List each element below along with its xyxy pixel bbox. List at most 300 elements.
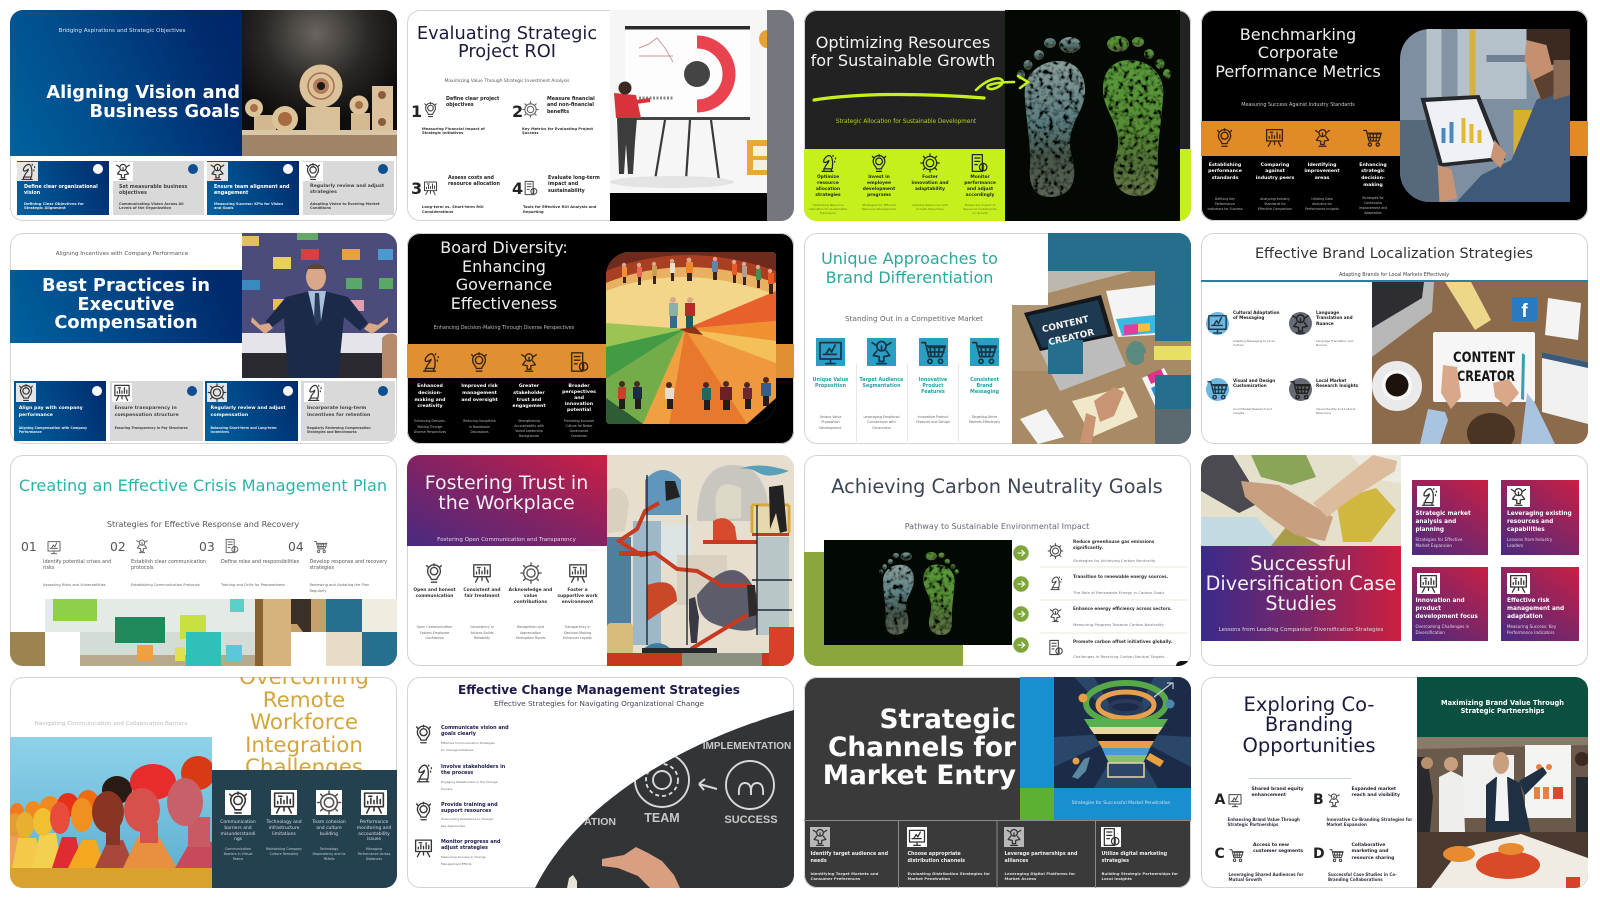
column 3	[911, 153, 949, 211]
heading	[548, 175, 600, 194]
note: Measuring Impact of	[965, 202, 995, 206]
label	[911, 175, 949, 193]
note: Analytics for	[1312, 202, 1332, 206]
label	[461, 384, 498, 404]
icon	[316, 790, 342, 815]
tile subtext: Communicating Vision Across All	[119, 202, 184, 206]
icon: speaker podium	[568, 350, 590, 372]
title: Market Entry	[823, 760, 1016, 791]
title	[239, 667, 369, 780]
heading: support resources	[441, 808, 491, 814]
item 2	[407, 760, 527, 796]
header text: Strategic Partnerships	[1461, 707, 1544, 715]
note: Strengthen Bonds	[516, 636, 545, 640]
icon: gear head	[468, 350, 490, 372]
item 4	[512, 175, 600, 214]
tile text	[115, 406, 179, 420]
heading	[1253, 842, 1303, 856]
note: Management Efforts	[441, 862, 472, 866]
heading	[1233, 310, 1279, 321]
numeral: 4	[512, 179, 523, 198]
tile subtext: Incentives	[210, 430, 229, 434]
photo: chalkboard with team diagram and hand	[535, 710, 794, 888]
note: Features and Design	[916, 420, 950, 424]
letter: A	[1214, 792, 1225, 808]
icon	[45, 539, 63, 555]
title: Exploring Co-	[1244, 693, 1374, 716]
label: Broader	[568, 384, 590, 389]
note: Engaging Stakeholders in the Change	[441, 780, 498, 784]
number: 03	[199, 539, 215, 554]
heading	[908, 850, 965, 864]
note: Branding Collaborations	[1328, 876, 1383, 882]
photo: leafy footprints	[824, 540, 1012, 645]
tile subtext: Aligning Compensation with Company	[19, 426, 87, 430]
label: and adjust	[967, 187, 993, 192]
tile heading: Effective risk	[1507, 598, 1550, 604]
tile subtext	[310, 202, 380, 210]
text: Identify potential crises and	[43, 559, 111, 565]
heading	[1252, 786, 1304, 800]
icon: chess	[419, 350, 441, 372]
note: Market Penetration	[908, 876, 950, 881]
subtext: Strategic Initiatives	[422, 131, 463, 135]
note	[963, 202, 997, 216]
tile heading: product	[1416, 606, 1441, 612]
icon: chess	[822, 154, 836, 172]
tile 3	[205, 380, 298, 440]
title: Evaluating Strategic	[417, 23, 597, 44]
text: Establish clear communication	[131, 559, 206, 565]
label: Proposition	[815, 384, 846, 389]
heading	[1102, 850, 1167, 864]
item 1	[411, 96, 500, 135]
photo: desk with notebook: f	[1521, 300, 1528, 322]
blue subtitle band	[1054, 788, 1191, 820]
column 2	[258, 790, 304, 882]
label: Establishing	[1209, 162, 1241, 168]
heading: Utilize digital marketing	[1102, 852, 1167, 856]
title: Effective Change Management Strategies	[458, 683, 740, 697]
label: adaptability	[915, 187, 945, 192]
note: Barriers in Virtual	[224, 852, 252, 856]
note	[417, 625, 452, 642]
note: Overcoming Resistance to Change:	[441, 817, 494, 821]
tile text: compensation structure	[115, 413, 179, 418]
heading: Identify target audience and	[810, 852, 888, 856]
icon	[520, 562, 542, 584]
title: Workforce	[250, 710, 358, 735]
tile text: Ensure transparency in	[115, 406, 177, 411]
heading	[1073, 539, 1154, 551]
subtitle: Strategies for Successful Market Penetration	[1072, 801, 1170, 806]
item 3	[1044, 603, 1191, 631]
icon: trophy	[1312, 127, 1333, 148]
tile subtext: Adapting Vision to Evolving Market	[310, 202, 380, 206]
label	[970, 378, 999, 396]
column 1	[1201, 121, 1250, 221]
note: Language Translation and	[1316, 338, 1353, 342]
label: strategies	[815, 193, 841, 198]
label	[1304, 162, 1340, 183]
heading: and non-financial	[547, 103, 594, 108]
text: Develop response and recovery	[310, 559, 387, 565]
note: Communication	[225, 847, 251, 851]
dividers	[1040, 565, 1188, 635]
heading: significantly.	[1073, 545, 1103, 550]
note: Framework	[820, 211, 836, 215]
icon	[1047, 639, 1064, 656]
icon	[1047, 607, 1064, 623]
heading: objectives	[446, 103, 474, 108]
label: creativity	[417, 404, 443, 409]
column 4	[955, 149, 1005, 221]
letter: C	[1214, 846, 1225, 862]
tile text: vision	[24, 190, 40, 196]
heading: Transition to renewable energy sources.	[1073, 574, 1168, 579]
note: Recognition and	[517, 625, 544, 629]
tile subtext	[210, 426, 277, 434]
title	[46, 82, 240, 122]
numeral: 1	[411, 102, 422, 121]
tile subtext	[214, 202, 283, 210]
item C	[1201, 841, 1309, 885]
note	[1228, 816, 1300, 826]
title: Creating an Effective Crisis Management Plan	[19, 476, 387, 495]
button	[187, 386, 197, 396]
subtext: Key Metrics for Evaluating Project	[522, 126, 593, 130]
label	[860, 378, 903, 390]
title: Business Goals	[90, 100, 240, 122]
step 3	[188, 537, 284, 597]
label	[1208, 162, 1242, 183]
icon	[524, 180, 538, 196]
illustration: funnel	[1054, 677, 1191, 788]
subtext	[422, 126, 485, 135]
orange band	[407, 344, 794, 378]
label: Technology and	[266, 820, 302, 825]
icon disc	[1289, 378, 1312, 401]
label: Enhancing	[1359, 162, 1387, 168]
heading: adjust strategies	[441, 845, 488, 851]
heading: Leverage partnerships and	[1004, 852, 1077, 856]
tile 1	[14, 380, 106, 440]
icon: chess	[304, 382, 324, 402]
tile note: Performance Indicators	[1507, 630, 1554, 635]
tile text: incentives for retention	[307, 413, 370, 418]
icon: head gear	[872, 154, 886, 172]
label	[813, 378, 848, 390]
heading	[1352, 842, 1394, 862]
slide: Best Practices in Executive Compensation	[10, 232, 397, 444]
lime band	[804, 149, 1191, 221]
note	[1258, 196, 1292, 212]
icon	[567, 562, 589, 584]
subtext: Long-term vs. Short-term ROI	[422, 205, 484, 209]
subtitle: Pathway to Sustainable Environmental Impact	[905, 522, 1089, 531]
title: Effectiveness	[451, 294, 557, 313]
number: 01	[21, 539, 37, 554]
tile heading: Leveraging existing	[1507, 511, 1572, 517]
tile subtext: and Goals	[214, 206, 234, 210]
label: Product	[922, 384, 944, 389]
note: Defining Key	[1215, 196, 1235, 200]
title: Executive	[77, 294, 175, 314]
label: fair treatment	[464, 594, 500, 599]
title: Performance Metrics	[1215, 62, 1381, 81]
subtitle: Strategic Allocation for Sustainable Development	[836, 119, 976, 125]
text: strategies	[310, 565, 334, 571]
icon	[1100, 827, 1120, 847]
heading: Expanded market	[1352, 786, 1396, 792]
tile text: Ensure team alignment and	[214, 184, 290, 190]
note: Performance Across	[358, 852, 390, 856]
note: Identifying Target Markets and	[810, 871, 878, 876]
subtext: Reporting	[523, 210, 544, 214]
green header	[1417, 677, 1588, 737]
photo: leafy footprints	[1005, 10, 1180, 221]
icon: gear	[303, 162, 323, 181]
column 3	[303, 790, 349, 882]
column 1	[407, 342, 456, 442]
icon	[424, 102, 437, 118]
title: Enhancing	[462, 257, 546, 276]
label: issues	[367, 837, 381, 842]
note: Accountability with	[514, 424, 544, 428]
tile note: Overcoming Challenges in	[1416, 624, 1469, 629]
arrow: lime brush stroke	[812, 74, 1030, 102]
photo: content creator desk with teal blocks	[1012, 232, 1191, 444]
label	[815, 174, 841, 198]
subtext: Success	[522, 131, 539, 135]
icon: gear head	[1214, 127, 1235, 148]
tile text	[119, 184, 188, 196]
tile subtext: Levels of the Organization	[119, 206, 171, 210]
subtext: Considerations	[422, 210, 453, 214]
heading	[547, 96, 595, 115]
blue title band	[10, 270, 242, 342]
icon	[810, 827, 830, 847]
label: and	[574, 396, 584, 401]
note	[912, 202, 948, 211]
arrow buttons	[1013, 545, 1029, 653]
icon	[522, 101, 539, 118]
note	[1316, 406, 1355, 414]
note: Mutual Growth	[1228, 876, 1262, 882]
icon	[1228, 847, 1245, 863]
title: Board Diversity:	[440, 238, 568, 257]
column 1	[407, 560, 457, 650]
note	[809, 202, 847, 215]
note: Insights	[1233, 410, 1244, 414]
slide: Fostering Trust in the Workplace	[407, 455, 794, 666]
heading	[1352, 786, 1400, 800]
column 4	[959, 338, 1011, 442]
heading: marketing and	[1352, 849, 1389, 854]
column 4	[1347, 121, 1399, 221]
note	[224, 847, 252, 862]
item 2	[1286, 302, 1371, 350]
text: risks	[43, 565, 54, 571]
tile text: Align pay with company	[19, 406, 83, 411]
title: Effective Brand Localization Strategies	[1255, 246, 1533, 262]
title: Diversification Case	[1206, 572, 1396, 595]
note: Measuring Success in Change	[441, 854, 486, 858]
subtitle: Aligning Incentives with Company Performance	[56, 250, 188, 256]
tile 2	[1501, 480, 1579, 555]
icon	[413, 762, 434, 784]
label: building	[320, 832, 338, 837]
label: trust and	[517, 398, 541, 403]
note: Transparency in	[564, 625, 591, 629]
tile note: Measuring Success: Key	[1507, 624, 1556, 629]
heading	[441, 803, 498, 815]
icon: person	[113, 162, 133, 181]
label: Monitor	[970, 175, 990, 180]
note	[463, 419, 496, 436]
heading: Assess costs and	[448, 176, 494, 181]
heading: Collaborative	[1352, 842, 1385, 848]
title: Achieving Carbon Neutrality Goals	[831, 475, 1163, 498]
photo: content creator desk with teal blocks: CONTENT	[1041, 314, 1091, 335]
button	[93, 164, 103, 174]
tile heading: management and	[1507, 606, 1564, 612]
title	[1215, 26, 1381, 81]
note: Training and Drills for Preparedness	[221, 583, 285, 587]
label: Messaging	[970, 390, 999, 395]
tile heading	[1507, 597, 1564, 621]
slide: Evaluating Strategic Project ROI	[407, 10, 794, 221]
note: Assessing Risks and Vulnerabilities	[43, 583, 106, 587]
note: Fosters Employee	[420, 631, 449, 635]
column 2	[862, 154, 896, 211]
heading: Research Insights	[1316, 383, 1358, 388]
note: Key Approaches	[441, 824, 465, 828]
column 1	[212, 790, 258, 882]
tile note: Leaders	[1507, 543, 1523, 548]
tile subtext: Conditions	[310, 206, 331, 210]
title: Best Practices in	[42, 275, 210, 296]
note	[441, 740, 495, 754]
label: Consistent and	[463, 588, 501, 593]
heading: resource allocation	[448, 182, 500, 187]
note: Enhancing Decision-	[414, 419, 446, 423]
gold band	[10, 868, 212, 888]
letter: D	[1313, 846, 1325, 862]
label	[266, 820, 302, 837]
icon	[1226, 792, 1244, 808]
label: value	[524, 594, 537, 599]
heading	[1316, 378, 1358, 389]
photo: row of colorful profile heads	[10, 737, 212, 868]
icon: growth chart	[1507, 573, 1530, 594]
title: Corporate	[1258, 43, 1338, 62]
item B	[1309, 785, 1417, 829]
tile heading	[1416, 510, 1471, 534]
icon: checklist	[969, 153, 989, 173]
label: accountability	[358, 832, 390, 837]
heading: of Messaging	[1233, 315, 1264, 320]
tile text: engagement	[214, 190, 248, 196]
tile heading: capabilities	[1507, 527, 1545, 533]
label: Target Audience	[860, 378, 903, 382]
note: Measuring Progress Towards Carbon Neutrality	[1073, 622, 1164, 627]
label: Comparing	[1261, 162, 1289, 168]
gradient title panel	[1201, 546, 1401, 641]
icon disc	[1206, 378, 1229, 401]
slide: Exploring Co-Branding Opportunities	[1201, 677, 1588, 888]
label: infrastructure	[269, 826, 299, 831]
note: Reliability	[474, 636, 490, 640]
note: Leveraging Digital Platforms for	[1004, 871, 1075, 876]
tile text	[210, 406, 286, 420]
heading: Communicate vision and	[441, 725, 509, 731]
item 3	[411, 175, 500, 214]
label	[512, 384, 546, 411]
gradient header	[407, 455, 607, 546]
label: ngs	[234, 837, 242, 842]
label: monitoring and	[357, 826, 391, 831]
tile note: Lessons from Industry	[1507, 537, 1552, 542]
note	[470, 625, 494, 642]
label: decision-	[418, 391, 442, 396]
note: Development	[819, 426, 842, 430]
photo: whiteboard with sticky notes and color squares	[10, 599, 397, 666]
label: stakeholder	[513, 391, 545, 396]
note: Market Expansion	[1326, 822, 1367, 826]
slide: Strategic Channels for Market Entry	[804, 677, 1191, 888]
heading: Define clear project	[446, 97, 499, 102]
label: Innovative	[919, 378, 947, 382]
note: Targeting Niche	[972, 415, 997, 419]
note: Proposition	[821, 420, 840, 424]
icon	[223, 538, 240, 554]
heading: Reduce greenhouse gas emissions	[1073, 539, 1154, 544]
subtext: Measuring Financial Impact of	[422, 126, 485, 130]
title: Brand Differentiation	[826, 268, 993, 287]
note: Local Market Research and	[1233, 406, 1272, 410]
tile 3	[207, 161, 299, 215]
label: Acknowledge and	[509, 588, 552, 593]
column 4	[348, 790, 394, 882]
note	[414, 419, 446, 436]
header text	[1441, 698, 1564, 716]
note: Strengthening	[518, 418, 540, 422]
title	[440, 239, 568, 314]
subtext	[522, 126, 593, 135]
label: allocation	[816, 187, 840, 192]
note: Optimizing Resource	[813, 202, 843, 206]
note: Effective Comparison	[1258, 207, 1292, 211]
label: Optimize	[817, 175, 839, 180]
item A	[1201, 785, 1309, 829]
tile text: Regularly review and adjust	[310, 184, 384, 189]
tile note: Diversification	[1416, 630, 1445, 635]
note: Decision-Making	[564, 631, 591, 635]
label: areas	[1315, 176, 1329, 181]
heading: Translation and	[1316, 315, 1353, 320]
column 2	[1250, 121, 1299, 221]
label: Brand	[976, 384, 993, 389]
tile heading	[1507, 510, 1572, 534]
illustration: people around a color fan	[606, 252, 776, 424]
note: Relevance	[1316, 410, 1331, 414]
note: Actions Builds	[470, 631, 494, 635]
subtext	[422, 205, 484, 214]
label: resource	[817, 181, 839, 186]
note	[916, 415, 950, 426]
blue column	[1020, 677, 1054, 788]
